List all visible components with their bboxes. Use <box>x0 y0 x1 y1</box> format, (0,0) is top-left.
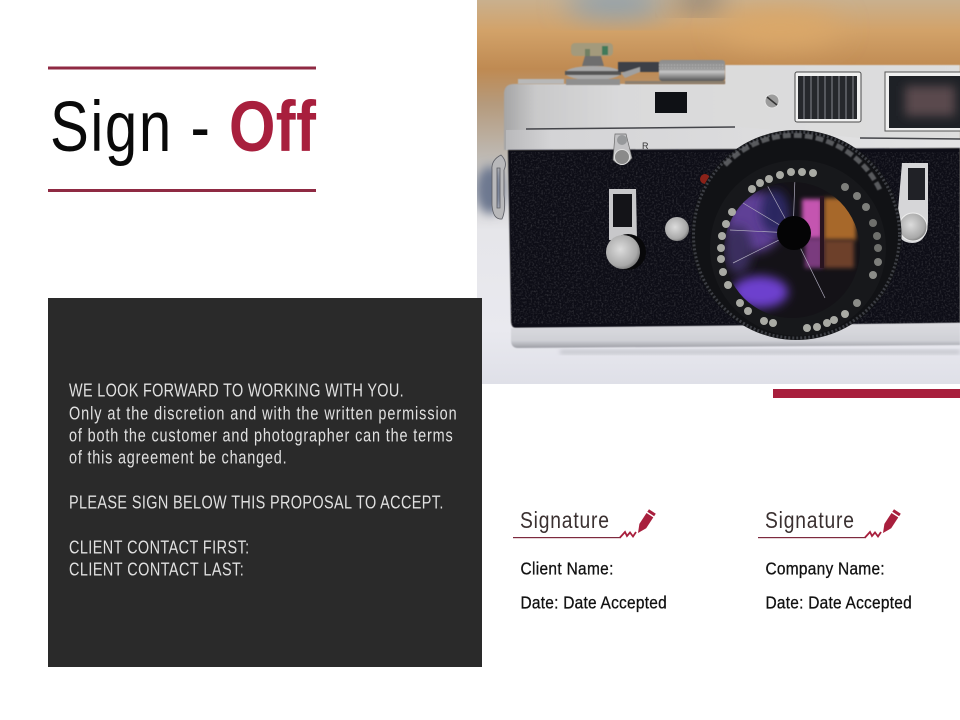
client name: Client Name: <box>520 558 613 579</box>
title top rule <box>48 66 316 70</box>
company name: Company Name: <box>766 558 885 579</box>
leather grain <box>511 152 960 324</box>
signature line <box>758 537 866 538</box>
lens glass <box>724 182 860 318</box>
company date: Date: Date Accepted <box>766 592 912 613</box>
title text: Sign - <box>50 86 210 166</box>
signature heading: Signature <box>765 507 854 533</box>
lens reflections <box>724 177 856 308</box>
camera windows <box>655 72 960 131</box>
client date: Date: Date Accepted <box>520 592 667 613</box>
R lever: R <box>642 141 649 151</box>
top plate lower band <box>506 127 960 150</box>
left strap lever <box>606 189 646 270</box>
leather body <box>508 148 960 328</box>
panel text: WE LOOK FORWARD TO WORKING WITH YOU. <box>69 380 404 401</box>
signature block: client <box>513 507 667 613</box>
accent bar <box>773 389 960 398</box>
right strap lever <box>897 163 928 243</box>
red dot <box>700 174 710 184</box>
panel text: Only at the discretion and with the written permission <box>69 403 457 424</box>
title text: Off <box>229 87 316 166</box>
signature heading: Signature <box>520 507 609 533</box>
lens bead ring <box>717 168 882 332</box>
signature line <box>513 537 621 538</box>
base shadow <box>560 350 960 354</box>
icon: pen signing <box>865 509 901 538</box>
title text <box>50 86 316 166</box>
lens assembly <box>692 130 902 340</box>
aperture hole <box>777 216 811 250</box>
lens outer barrel <box>692 130 902 340</box>
icon: pen signing <box>620 509 656 538</box>
panel text <box>69 380 457 580</box>
panel text: CLIENT CONTACT FIRST: <box>69 537 249 558</box>
small side screw <box>665 217 689 241</box>
panel text: PLEASE SIGN BELOW THIS PROPOSAL TO ACCEPT. <box>69 492 443 513</box>
photo: rangefinder camera <box>476 0 960 384</box>
R lever <box>613 134 649 165</box>
title bottom rule <box>48 189 316 192</box>
shutter and wind knobs <box>518 43 725 85</box>
strap lug <box>492 155 505 219</box>
panel text: of both the customer and photographer can the terms <box>69 425 453 446</box>
panel text: of this agreement be changed. <box>69 447 287 468</box>
silver base plate <box>511 323 960 348</box>
signature block: company <box>758 507 912 613</box>
title group <box>48 66 316 192</box>
camera top plate <box>504 65 960 150</box>
dark text panel <box>48 298 482 667</box>
blurred backdrop <box>476 0 960 384</box>
panel text: CLIENT CONTACT LAST: <box>69 559 244 580</box>
